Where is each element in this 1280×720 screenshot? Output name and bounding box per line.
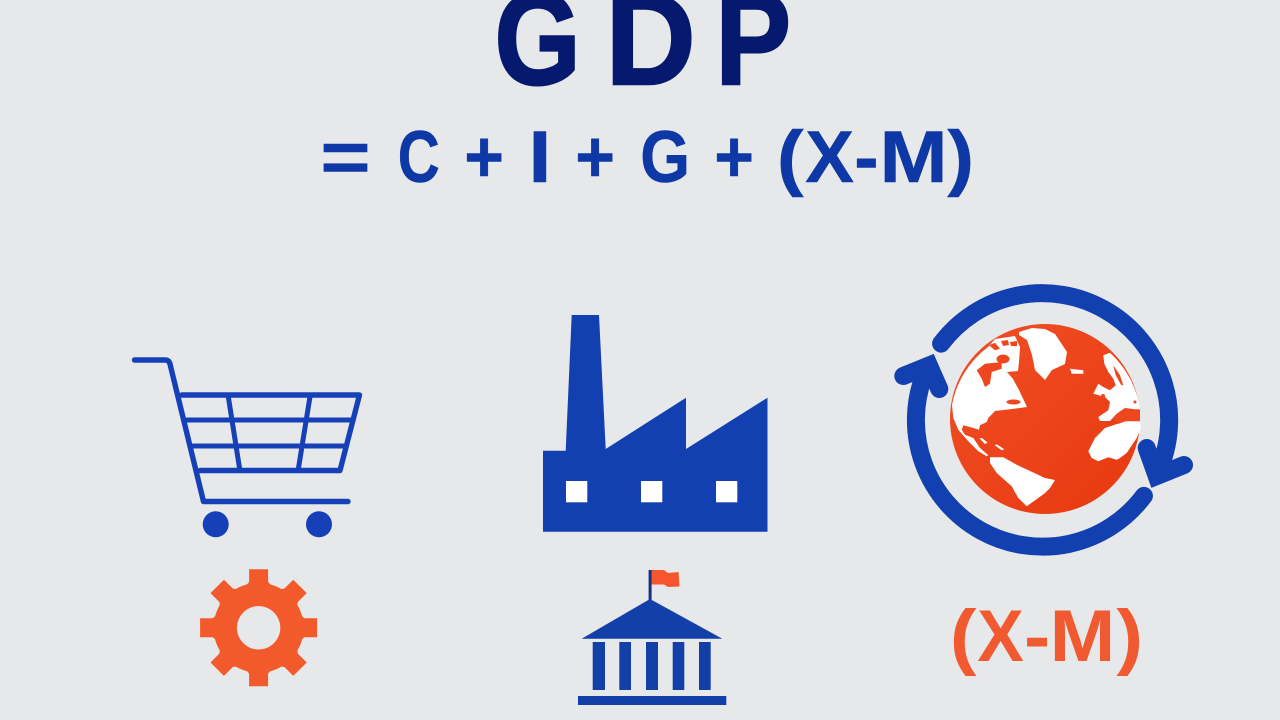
icon: orange gear: [200, 569, 317, 686]
formula: = C + I + G + (X-M): [320, 117, 974, 198]
formula: = C + I + G + (X-M): +: [575, 117, 615, 198]
formula: = C + I + G + (X-M): G: [640, 117, 690, 198]
formula: = C + I + G + (X-M): ): [947, 117, 974, 198]
formula: = C + I + G + (X-M): X: [805, 117, 854, 198]
label: (X-M): -: [1024, 596, 1050, 677]
icon: factory: [543, 315, 768, 532]
icon: globe with circular trade arrows: [903, 293, 1184, 547]
formula: = C + I + G + (X-M): C: [398, 117, 440, 198]
formula: = C + I + G + (X-M): +: [464, 117, 504, 198]
circular arrow: upper right: [941, 293, 1184, 476]
label: (X-M): [950, 596, 1143, 677]
formula: = C + I + G + (X-M): -: [854, 117, 878, 198]
label: (X-M): X: [977, 596, 1024, 677]
label: (X-M): ): [1116, 596, 1143, 677]
icon: government building with flag: [578, 570, 726, 705]
formula: = C + I + G + (X-M): +: [714, 117, 754, 198]
circular arrow: lower left: [903, 366, 1144, 547]
formula: = C + I + G + (X-M): (: [777, 117, 804, 198]
formula: = C + I + G + (X-M): I: [528, 117, 552, 198]
icon: shopping cart: [134, 360, 360, 537]
globe: [950, 324, 1141, 514]
title: GDP: [495, 0, 791, 112]
label: (X-M): M: [1050, 596, 1115, 677]
formula: = C + I + G + (X-M): M: [880, 117, 948, 198]
label: (X-M): (: [950, 596, 977, 677]
formula: = C + I + G + (X-M): =: [320, 117, 371, 198]
